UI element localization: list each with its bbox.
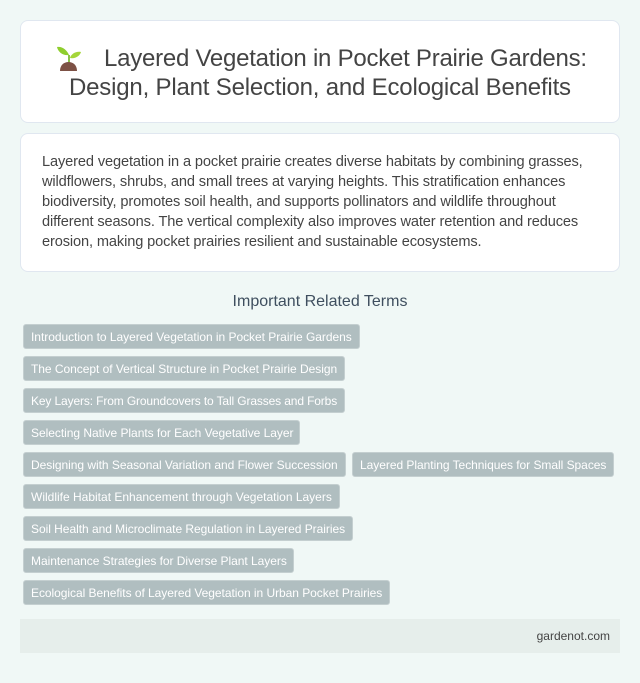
paragraph line 4: different seasons. The vertical complexity also improves water retention and reduces bbox=[42, 214, 578, 230]
chip: small spaces: Layered Planting Techniques for Small Spaces bbox=[360, 458, 606, 472]
chip: native plants: Selecting Native Plants for Each Vegetative Layer bbox=[31, 426, 293, 440]
chip: maintenance: Maintenance Strategies for Diverse Plant Layers bbox=[31, 554, 287, 568]
title line 1: Layered Vegetation in Pocket Prairie Gardens: bbox=[104, 45, 587, 72]
paragraph line 5: erosion, making pocket prairies resilient and sustainable ecosystems. bbox=[42, 234, 481, 250]
icon: seedling bbox=[57, 46, 81, 71]
chip: seasonal variation bbox=[23, 452, 346, 477]
chip: wildlife habitat bbox=[23, 484, 340, 509]
title line 2: Design, Plant Selection, and Ecological Benefits bbox=[69, 74, 571, 101]
heading: related terms: Important Related Terms bbox=[233, 293, 407, 310]
chip: ecological benefits bbox=[23, 580, 390, 605]
chip: key layers bbox=[23, 388, 345, 413]
chip: wildlife habitat: Wildlife Habitat Enhancement through Vegetation Layers bbox=[31, 490, 332, 504]
chip: ecological benefits: Ecological Benefits of Layered Vegetation in Urban Pocket Prairies bbox=[31, 586, 382, 600]
panel: introduction text bbox=[20, 133, 620, 272]
chip: key layers: Key Layers: From Groundcovers to Tall Grasses and Forbs bbox=[31, 394, 337, 408]
chip: native plants bbox=[23, 420, 300, 445]
footer bar bbox=[20, 619, 620, 653]
chip: soil health bbox=[23, 516, 353, 541]
chip: small spaces bbox=[352, 452, 614, 477]
paragraph line 2: wildflowers, shrubs, and small trees at varying heights. This stratification enhances bbox=[42, 174, 565, 190]
chip: vertical structure bbox=[23, 356, 345, 381]
paragraph line 1: Layered vegetation in a pocket prairie creates diverse habitats by combining grasses, bbox=[42, 154, 583, 170]
chip: introduction: Introduction to Layered Vegetation in Pocket Prairie Gardens bbox=[31, 330, 352, 344]
chip: seasonal variation: Designing with Seasonal Variation and Flower Succession bbox=[31, 458, 338, 472]
chip: introduction bbox=[23, 324, 360, 349]
chip: vertical structure: The Concept of Vertical Structure in Pocket Prairie Design bbox=[31, 362, 337, 376]
chip: maintenance bbox=[23, 548, 294, 573]
chip: soil health: Soil Health and Microclimate Regulation in Layered Prairies bbox=[31, 522, 345, 536]
footer source: gardenot.com bbox=[537, 629, 610, 643]
paragraph line 3: biodiversity, promotes soil health, and supports pollinators and wildlife throughout bbox=[42, 194, 556, 210]
panel: title bbox=[20, 20, 620, 123]
